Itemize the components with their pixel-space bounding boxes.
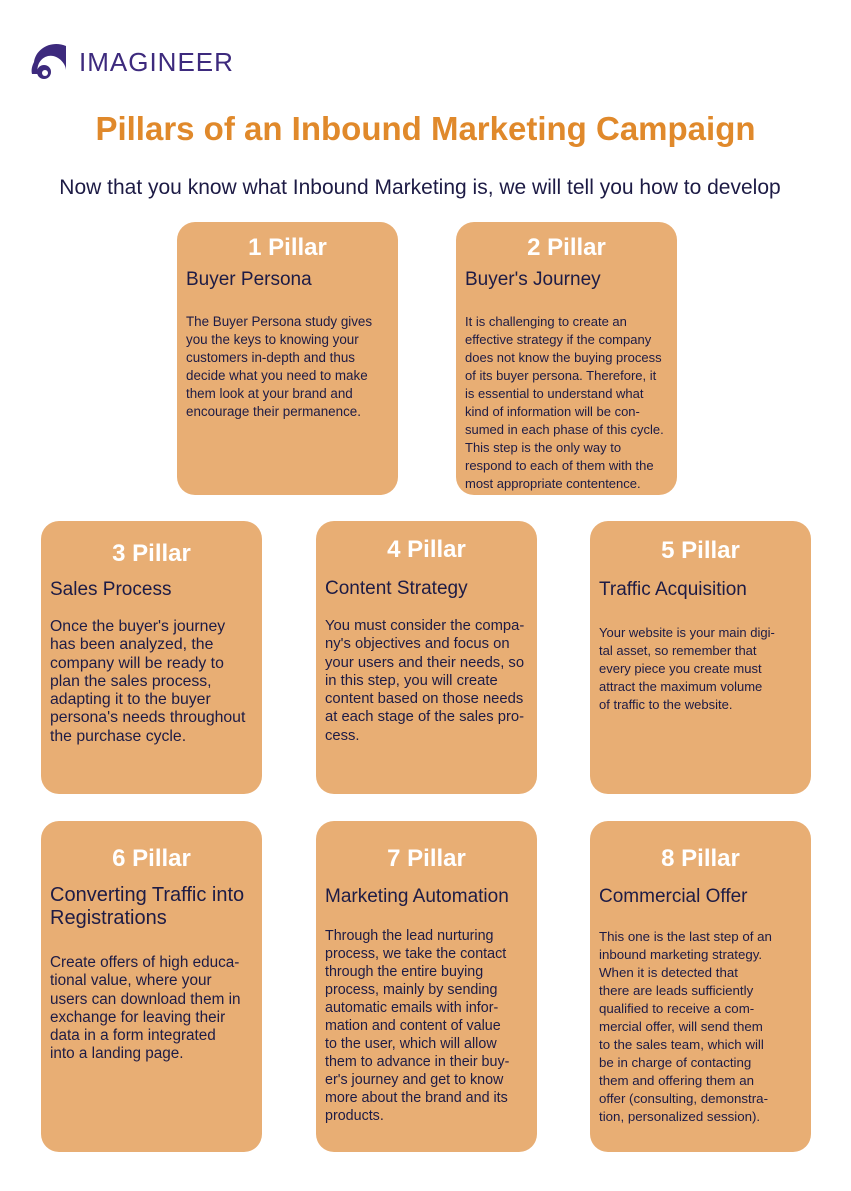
card 6: exchange for leaving their [50, 1009, 225, 1026]
card 4: at each stage of the sales pro- [325, 709, 524, 725]
card 6: into a landing page. [50, 1045, 184, 1062]
card 3: plan the sales process, [50, 673, 212, 690]
card 7: to the user, which will allow [325, 1036, 497, 1052]
card 4: Content Strategy [325, 578, 468, 599]
card 2: It is challenging to create an [465, 314, 627, 329]
card 2 [456, 222, 677, 495]
card 4: in this step, you will create [325, 673, 498, 689]
card 2: 2 Pillar [527, 234, 606, 261]
card 2: kind of information will be con- [465, 404, 640, 419]
card 3: adapting it to the buyer [50, 691, 211, 708]
card 2: Buyer's Journey [465, 269, 601, 290]
card 8: qualified to receive a com- [599, 1001, 754, 1016]
card 6 [41, 821, 262, 1152]
card 1: you the keys to knowing your [186, 332, 359, 347]
card 1: Buyer Persona [186, 269, 312, 290]
card 5: Traffic Acquisition [599, 579, 747, 600]
card 2: respond to each of them with the [465, 458, 654, 473]
card 7: mation and content of value [325, 1018, 501, 1034]
card 8: mercial offer, will send them [599, 1019, 763, 1034]
card 5: tal asset, so remember that [599, 643, 757, 658]
card 7: through the entire buying [325, 964, 483, 980]
card 4: ny's objectives and focus on [325, 636, 510, 652]
card 7: process, mainly by sending [325, 982, 497, 998]
card 6: Registrations [50, 907, 167, 929]
card 6: users can download them in [50, 991, 240, 1008]
card 8: offer (consulting, demonstra- [599, 1091, 768, 1106]
card 8: inbound marketing strategy. [599, 947, 762, 962]
card 6: 6 Pillar [112, 845, 191, 872]
card 4: You must consider the compa- [325, 618, 524, 634]
card 7: process, we take the contact [325, 946, 506, 962]
card 7: er's journey and get to know [325, 1072, 503, 1088]
card 1: customers in-depth and thus [186, 350, 355, 365]
card 3 [41, 521, 262, 794]
card 7: products. [325, 1108, 384, 1124]
card 3: Once the buyer's journey [50, 618, 225, 635]
card 4: cess. [325, 728, 360, 744]
card 8: them and offering them an [599, 1073, 754, 1088]
card 1: The Buyer Persona study gives [186, 314, 372, 329]
card 8: be in charge of contacting [599, 1055, 751, 1070]
card 6: Converting Traffic into [50, 884, 244, 906]
card 7: Marketing Automation [325, 886, 509, 907]
card 2: sumed in each phase of this cycle. [465, 422, 664, 437]
card 7: Through the lead nurturing [325, 928, 494, 944]
card 5: 5 Pillar [661, 537, 740, 564]
card 7: 7 Pillar [387, 845, 466, 872]
card 1: 1 Pillar [248, 234, 327, 261]
card 4: 4 Pillar [387, 536, 466, 563]
card 3: 3 Pillar [112, 540, 191, 567]
card 8: When it is detected that [599, 965, 738, 980]
card 2: This step is the only way to [465, 440, 621, 455]
card 4 [316, 521, 537, 794]
card 6: tional value, where your [50, 972, 212, 989]
card 8: to the sales team, which will [599, 1037, 764, 1052]
card 8: Commercial Offer [599, 886, 748, 907]
card 2: of its buyer persona. Therefore, it [465, 368, 656, 383]
card 5: Your website is your main digi- [599, 625, 775, 640]
card 7: automatic emails with infor- [325, 1000, 498, 1016]
card 8: tion, personalized session). [599, 1109, 760, 1124]
card 7: them to advance in their buy- [325, 1054, 509, 1070]
card 8: This one is the last step of an [599, 929, 772, 944]
logo [32, 44, 234, 79]
card 1: them look at your brand and [186, 386, 353, 401]
subtitle: Now that you know what Inbound Marketing is, we will tell you how to develop [59, 176, 781, 199]
card 8: 8 Pillar [661, 845, 740, 872]
card 2: effective strategy if the company [465, 332, 651, 347]
card 2: most appropriate contentence. [465, 476, 641, 491]
card 3: persona's needs throughout [50, 709, 245, 726]
card 6: data in a form integrated [50, 1027, 216, 1044]
card 1 [177, 222, 398, 495]
card 7: more about the brand and its [325, 1090, 508, 1106]
card 1: encourage their permanence. [186, 404, 361, 419]
card 3: the purchase cycle. [50, 728, 186, 745]
card 5 [590, 521, 811, 794]
card 4: content based on those needs [325, 691, 523, 707]
card 1: decide what you need to make [186, 368, 368, 383]
card 5: every piece you create must [599, 661, 762, 676]
card 2: does not know the buying process [465, 350, 662, 365]
logo: IMAGINEER [79, 47, 234, 77]
card 8 [590, 821, 811, 1152]
card 5: of traffic to the website. [599, 697, 732, 712]
card 3: has been analyzed, the [50, 636, 213, 653]
card 7 [316, 821, 537, 1152]
card 3: Sales Process [50, 579, 171, 600]
card 4: your users and their needs, so [325, 655, 524, 671]
card 6: Create offers of high educa- [50, 954, 239, 971]
card 2: is essential to understand what [465, 386, 644, 401]
card 8: there are leads sufficiently [599, 983, 753, 998]
title: Pillars of an Inbound Marketing Campaign [95, 110, 756, 147]
card 5: attract the maximum volume [599, 679, 762, 694]
card 3: company will be ready to [50, 655, 224, 672]
